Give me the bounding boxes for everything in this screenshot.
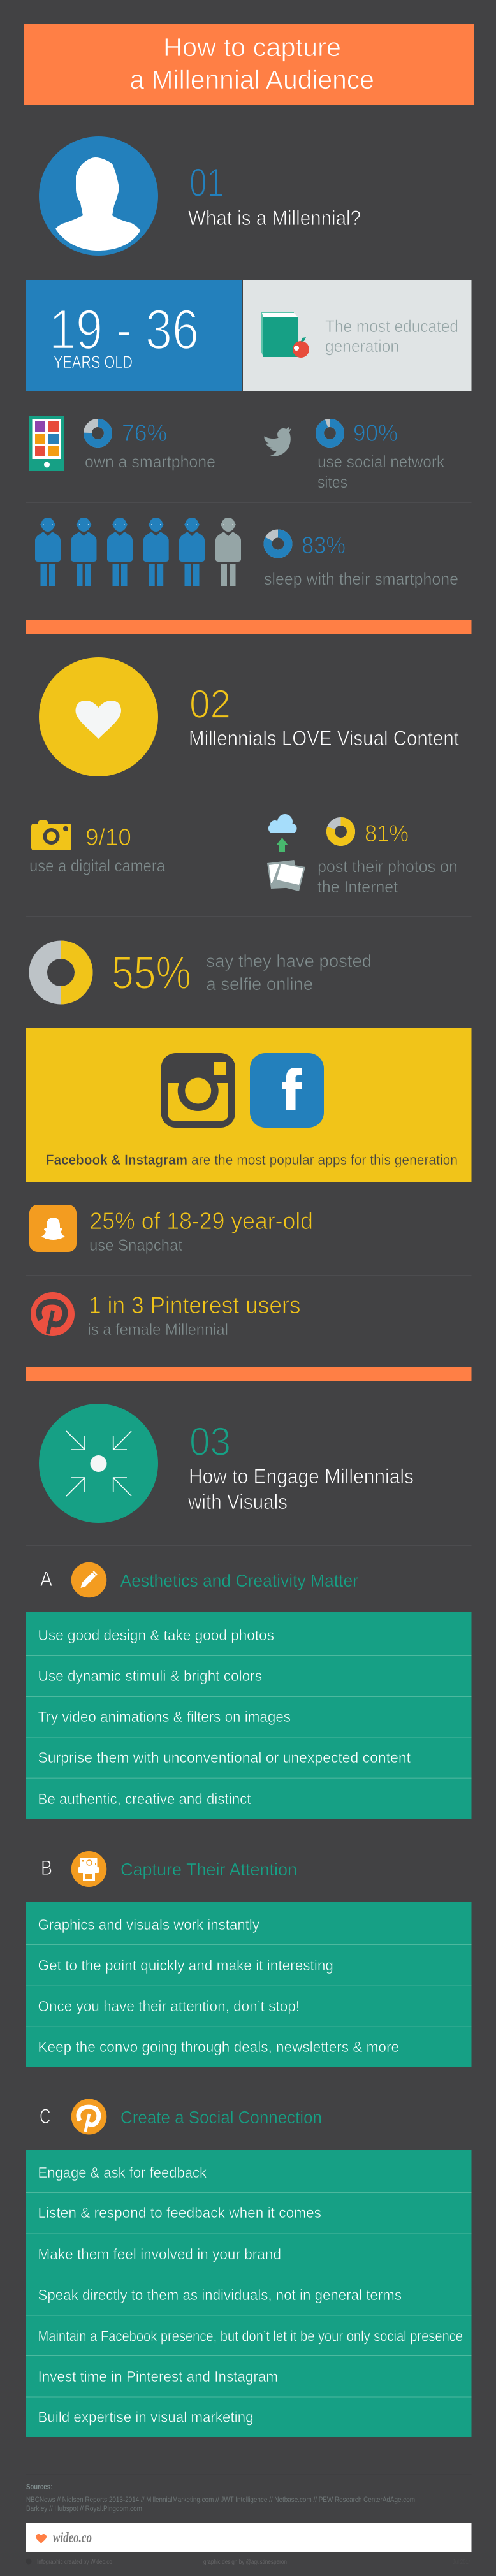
subsection C heading: [40, 2099, 322, 2134]
panel: list B: Get to the point quickly and make it interesting: [38, 1957, 333, 1974]
subsection A heading: Aesthetics and Creativity Matter: [120, 1571, 358, 1590]
label say they have posted a selfie online: [207, 951, 372, 994]
icon: smartphone: [29, 416, 64, 471]
caption: Facebook & Instagram: [46, 1152, 187, 1168]
panel: most educated generation: generation: [325, 337, 399, 356]
panel: list A: Use good design & take good photos: [38, 1627, 274, 1643]
subsection A heading: A: [40, 1568, 53, 1590]
panel: list B: Keep the convo going through deals, newsletters & more: [38, 2039, 399, 2055]
icon: twitter bird: [262, 426, 298, 458]
wideo.co logo bar: wideo.co: [53, 2529, 92, 2545]
section heading: Millennials LOVE Visual Content: [189, 727, 459, 750]
section heading: How to Engage Millennials: [189, 1465, 414, 1488]
icon: person in blue circle: [39, 136, 158, 256]
stat 9/10: 9/10: [85, 824, 131, 850]
icon: six people, five highlighted: [35, 518, 241, 586]
subsection B heading: [41, 1851, 297, 1887]
sources text: NBCNews // Nielsen Reports 2013-2014 // MillennialMarketing.com // JWT Intelligence // Netbase.com // PEW Research CenterAdAge.com: [26, 2495, 415, 2504]
footer credits: [26, 2559, 471, 2566]
footer credits: Jul 2014: [453, 2559, 471, 2566]
panel: age range: [26, 280, 242, 391]
label use snapchat: use Snapchat: [89, 1237, 182, 1255]
section heading: What is a Millennial?: [188, 207, 361, 229]
panel: list C: [26, 2150, 472, 2437]
sources text: Sources: [26, 2484, 50, 2491]
label sleep with their smartphone: sleep with their smartphone: [264, 569, 458, 588]
donut chart 55%: [38, 950, 84, 995]
label use social network sites: [317, 452, 445, 491]
icon: book and apple: [261, 312, 309, 358]
stat 76%: 76%: [122, 420, 167, 446]
footer credits: Infographic created by Wideo.co: [37, 2559, 112, 2566]
section heading: with Visuals: [187, 1490, 288, 1513]
label use a digital camera: use a digital camera: [29, 856, 165, 875]
icon: camera: [31, 820, 71, 850]
caption: are the most popular apps for this generation: [191, 1152, 458, 1168]
panel: list A: Be authentic, creative and distinct: [38, 1791, 251, 1807]
footer credits: graphic design by @agustinesperon: [203, 2559, 287, 2566]
section number 02: 02: [189, 682, 231, 727]
icon: heart in yellow circle: [39, 657, 158, 776]
panel: section 01 what is a millennial: [26, 136, 472, 588]
stat 90%: 90%: [353, 420, 398, 446]
label post their photos on the internet: the Internet: [317, 877, 398, 896]
sources text: [26, 2484, 415, 2513]
section number 03: 03: [189, 1420, 231, 1464]
panel: list A: Try video animations & filters on images: [38, 1708, 291, 1725]
label is a female millennial: is a female Millennial: [88, 1321, 228, 1339]
panel: section 02 millennials love visual content: [26, 657, 472, 1339]
icon: instagram: [161, 1053, 235, 1128]
title banner: a Millennial Audience: [130, 65, 374, 94]
panel: list C: Listen & respond to feedback when it comes: [38, 2204, 321, 2221]
icon: arrows converging in green circle: [39, 1404, 158, 1523]
panel: list C: Build expertise in visual marketing: [38, 2408, 254, 2425]
panel: list B: Once you have their attention, don’t stop!: [38, 1998, 300, 2014]
label say they have posted a selfie online: a selfie online: [207, 974, 313, 994]
panel: age range: YEARS OLD: [54, 353, 133, 372]
subsection C heading: Create a Social Connection: [120, 2107, 322, 2127]
label post their photos on the internet: post their photos on: [317, 857, 458, 876]
icon: pinterest in orange circle: [71, 2099, 106, 2134]
stat 83%: 83%: [302, 532, 346, 558]
icon: instant camera: [71, 1851, 106, 1887]
orange section bar: [26, 1367, 472, 1381]
section heading: [187, 1465, 414, 1513]
subsection B heading: Capture Their Attention: [120, 1859, 297, 1879]
section number 01: 01: [189, 161, 224, 205]
panel: list B: [26, 1902, 472, 2067]
donut chart 76%: [88, 423, 108, 444]
panel: most educated generation: [243, 280, 472, 391]
title banner: [24, 24, 474, 105]
panel: list C: Speak directly to them as individuals, not in general terms: [38, 2287, 402, 2303]
icon: pinterest: [31, 1292, 75, 1336]
stat 1 in 3 pinterest users: 1 in 3 Pinterest users: [89, 1292, 301, 1318]
label say they have posted a selfie online: say they have posted: [207, 951, 372, 971]
label use social network sites: use social network: [317, 452, 445, 471]
panel: popular apps: [26, 1028, 472, 1182]
panel: list A: [26, 1612, 472, 1819]
icon: snapchat: [29, 1205, 77, 1252]
sources text: Barkley // Hubspot // Royal.Pingdom.com: [26, 2504, 142, 2513]
donut chart 90%: [320, 423, 340, 444]
label post their photos on the internet: [317, 857, 458, 896]
icon: pencil: [71, 1562, 106, 1597]
panel: list C: Invest time in Pinterest and Instagram: [38, 2368, 278, 2385]
donut chart 81%: [330, 821, 351, 841]
wideo.co logo bar: [26, 2523, 472, 2552]
orange section bar: [26, 620, 472, 634]
sources text: :: [50, 2484, 52, 2491]
subsection C heading: C: [40, 2105, 51, 2128]
stat 55%: 55%: [112, 948, 191, 999]
title banner: How to capture: [163, 33, 341, 62]
panel: age range: 19 - 36: [49, 298, 199, 361]
caption: [46, 1152, 458, 1168]
panel: list B: Graphics and visuals work instantly: [38, 1916, 259, 1933]
subsection B heading: B: [41, 1856, 52, 1879]
icon: cloud upload with photos: [267, 814, 305, 891]
donut chart 83%: [268, 534, 288, 554]
icon: facebook: [250, 1053, 324, 1128]
panel: section 03 how to engage millennials: [26, 1404, 472, 2437]
panel: most educated generation: The most educated: [325, 317, 458, 336]
stat 81%: 81%: [365, 820, 409, 847]
subsection A heading: [40, 1562, 358, 1597]
panel: list A: Use dynamic stimuli & bright colors: [38, 1668, 262, 1684]
panel: list C: Make them feel involved in your brand: [38, 2246, 281, 2262]
label own a smartphone: own a smartphone: [85, 452, 215, 471]
panel: list A: Surprise them with unconventional or unexpected content: [38, 1749, 411, 1766]
label use social network sites: sites: [317, 472, 347, 491]
stat 25% of 18-29 year-old: 25% of 18-29 year-old: [89, 1208, 313, 1234]
panel: list C: Engage & ask for feedback: [38, 2164, 207, 2181]
